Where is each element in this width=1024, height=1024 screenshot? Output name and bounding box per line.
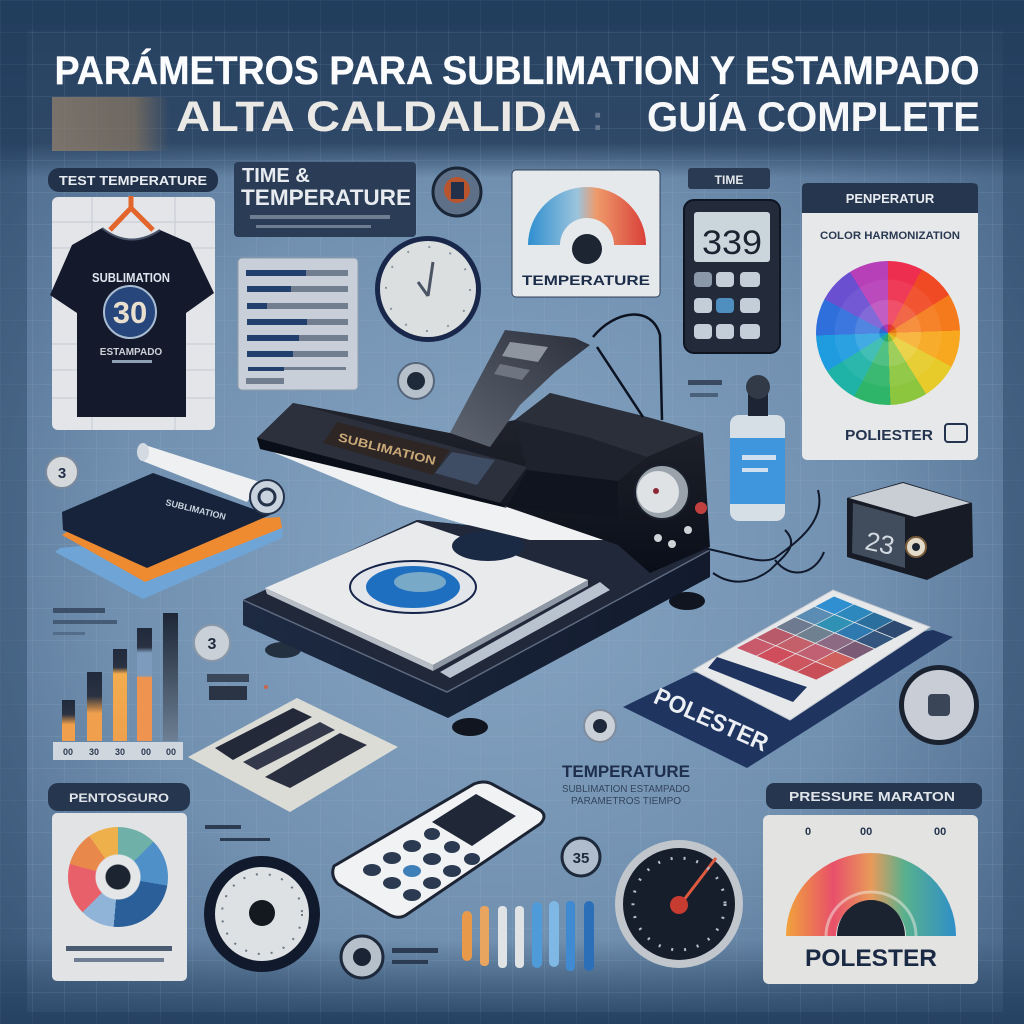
press block — [507, 470, 618, 518]
icon: calculator: 339 — [702, 224, 762, 262]
icon: t-shirt — [50, 196, 214, 417]
title line 2: : — [592, 100, 603, 138]
icon: clock — [375, 236, 481, 342]
press cables — [593, 315, 662, 420]
icon: speedometer — [615, 840, 743, 968]
heading: pressure marathon — [766, 783, 982, 809]
caption beside bottom knob — [392, 948, 438, 964]
panel: color wheel polyester: POLIESTER — [845, 427, 933, 444]
title line 2: GUÍA COMPLETE — [647, 93, 980, 140]
temperature caption: TEMPERATURE — [562, 762, 690, 781]
icon: digital timer box: 23 — [863, 526, 897, 561]
heading: pressure marathon: PRESSURE MARATON — [789, 789, 955, 804]
power cables — [703, 490, 824, 582]
press white underside — [263, 448, 607, 540]
icon: digital timer box — [847, 482, 973, 580]
icon: stacked fabric — [55, 443, 284, 599]
heading: time — [688, 168, 770, 189]
icon: remote keypad — [333, 782, 544, 917]
press feet — [265, 592, 705, 736]
panel: pressure gauge polyester: 00 — [860, 826, 872, 838]
panel: temperature gauge: TEMPERATURE — [522, 272, 650, 288]
icon: small knob bottom — [341, 936, 383, 978]
panel: pressure gauge polyester: 0 — [805, 826, 811, 838]
icon: number badge — [46, 456, 78, 488]
icon: stacked fabric: SUBLIMATION — [165, 497, 227, 522]
icon: number badge: 3 — [58, 465, 66, 482]
title line 1: PARÁMETROS PARA SUBLIMATION Y ESTAMPADO — [54, 48, 980, 93]
panel: time and temperature label: TIME & — [242, 165, 310, 187]
temperature caption: PARAMETROS TIEMPO — [571, 796, 681, 807]
heading: time: TIME — [715, 173, 743, 187]
icon: round dial right — [899, 665, 979, 745]
text snippet near bottle — [688, 380, 722, 397]
polyester fabric tag: POLESTER — [650, 683, 772, 757]
press body top — [515, 393, 703, 457]
panel: color wheel polyester: PENPERATUR — [846, 191, 935, 206]
panel: color swatch tablet — [693, 590, 930, 720]
press foot pad — [452, 531, 524, 561]
bar chart: 30 — [115, 747, 125, 757]
roll of paper — [137, 443, 284, 514]
icon: t-shirt: 30 — [113, 295, 147, 330]
chart: color wheel — [816, 261, 960, 405]
icon: small knob center — [584, 710, 616, 742]
press platen — [265, 522, 588, 665]
color tubes — [462, 901, 594, 971]
heading: bottom-left label — [48, 783, 190, 811]
temperature caption: SUBLIMATION ESTAMPADO — [562, 784, 690, 795]
icon: t-shirt: ESTAMPADO — [100, 347, 162, 358]
icon: badge 3: 3 — [208, 636, 217, 653]
icon: badge 35: 35 — [573, 850, 589, 867]
press silhouette — [257, 393, 710, 573]
bar chart: 30 — [89, 747, 99, 757]
icon: t-shirt: SUBLIMATION — [92, 270, 170, 285]
printed logo — [350, 561, 476, 613]
chart: swatch grid — [737, 597, 913, 680]
press display: SUBLIMATION — [337, 430, 437, 468]
icon: calculator — [684, 200, 780, 353]
bar chart: 00 — [166, 747, 176, 757]
panel: list sheet — [238, 258, 358, 390]
panel: color wheel polyester — [802, 183, 978, 460]
press handle — [450, 330, 590, 447]
title line 2: ALTA CALDALIDA — [176, 93, 581, 141]
panel: pressure gauge polyester — [763, 815, 978, 984]
press base — [243, 520, 710, 718]
title line 2 — [52, 93, 980, 151]
panel: pressure gauge polyester: POLESTER — [805, 945, 937, 972]
bar chart — [53, 608, 183, 760]
press buttons — [654, 526, 692, 548]
heading: test temperature: TEST TEMPERATURE — [59, 173, 207, 188]
panel: time and temperature label — [234, 162, 416, 237]
panel: pressure gauge polyester: 00 — [934, 826, 946, 838]
icon: large dial — [204, 856, 320, 972]
heat press machine — [243, 315, 710, 736]
heading: test temperature — [48, 168, 218, 192]
small text near dial — [205, 825, 270, 841]
press upper arm — [257, 403, 527, 503]
panel: t-shirt — [48, 168, 218, 430]
small caption near chart — [207, 674, 268, 700]
printed sheet — [188, 698, 398, 812]
chart: rainbow gauge — [786, 853, 956, 936]
press display — [323, 422, 450, 475]
press dial — [635, 465, 689, 519]
icon: small knob — [398, 363, 434, 399]
temperature caption — [562, 762, 690, 807]
icon: small badge — [433, 168, 481, 216]
polyester fabric tag — [623, 630, 953, 768]
icon: badge 35 — [562, 838, 600, 876]
bar chart: 00 — [141, 747, 151, 757]
panel: temperature gauge — [512, 170, 660, 297]
icon: badge 3 — [194, 625, 230, 661]
panel: donut card — [52, 813, 187, 981]
panel: time and temperature label: TEMPERATURE — [241, 185, 411, 210]
panel: color wheel polyester: COLOR HARMONIZATION — [820, 230, 960, 242]
icon: spray bottle — [730, 375, 785, 521]
chart: donut — [68, 827, 168, 927]
bar chart: 00 — [63, 747, 73, 757]
heading: bottom-left label: PENTOSGURO — [69, 791, 169, 805]
